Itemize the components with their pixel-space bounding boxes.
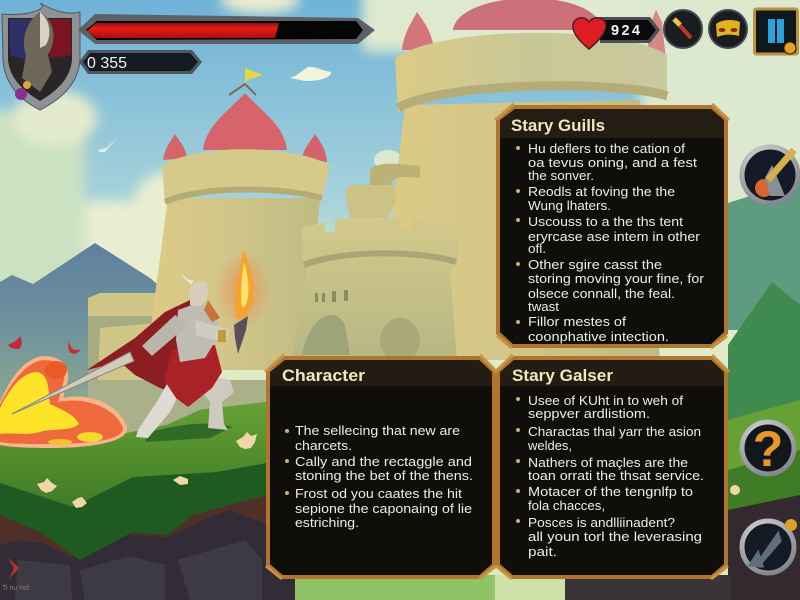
bullet list: Fillor mestes of [528, 314, 626, 329]
bullet list: Usee of KUht in to weh of [528, 393, 683, 408]
button: arrow [742, 519, 797, 573]
big rear tower [370, 0, 667, 360]
fire blast [0, 356, 127, 448]
bullet list: storing moving your fine, for [528, 271, 705, 286]
bullet list: eryrcase ase intem in other [528, 229, 701, 244]
bullet list: seppver ardlistiom. [528, 406, 650, 421]
bullet list: charcets. [295, 438, 352, 453]
gauntlet [234, 316, 248, 354]
bullet list: Nathers of maçles are the [528, 455, 688, 470]
flowers [37, 432, 740, 508]
ground: grass and stone cliff: Ti nu htd [2, 585, 29, 592]
HUD: sword button [664, 10, 702, 48]
flame [235, 250, 254, 319]
bullet list: fola chacces, [528, 498, 605, 513]
HUD: shield portrait [2, 3, 80, 110]
petals [8, 336, 81, 354]
bullet list: Wung lhaters. [528, 198, 611, 213]
heading: Stary Guills [511, 116, 605, 135]
HUD: heart counter [573, 17, 660, 49]
HUD: score counter [79, 50, 202, 74]
bullet list [516, 141, 705, 344]
heading: Character [282, 366, 365, 385]
bullet list: twast [528, 299, 559, 314]
bullet list: sepione the caponaing of lie [295, 501, 472, 516]
HUD: health bar [78, 14, 375, 44]
bullet list: Uscouss to a the ths tent [528, 214, 683, 229]
back leg [202, 375, 234, 430]
torso [176, 302, 218, 362]
left small tower [88, 293, 167, 430]
panel: Character [265, 355, 497, 579]
button: help: ? [753, 421, 783, 477]
front tower with cannon turret [292, 185, 458, 362]
central tower [145, 68, 330, 370]
bullet list: all youn torl the leverasing [528, 529, 702, 544]
background: right hills and trees [728, 180, 800, 600]
bullet list: oa tevus oning, and a fest [528, 155, 697, 170]
torch glow [215, 250, 271, 330]
ground: grass and stone cliff [0, 380, 730, 600]
bullet list: Frost od you caates the hit [295, 486, 462, 501]
HUD: score counter: 0 355 [87, 55, 127, 72]
HUD: pause button [754, 9, 798, 54]
torch arm [195, 320, 230, 342]
bullet list: Charactas thal yarr the asion [528, 424, 701, 439]
sword arm [142, 315, 188, 356]
bullet list: The sellecing that new are [295, 423, 460, 438]
bullet list: Cally and the rectaggle and [295, 454, 472, 469]
kilt [164, 345, 222, 407]
heading: Stary Galser [512, 366, 613, 385]
bullet list: Other sgire casst the [528, 257, 662, 272]
bullet list: pait. [528, 544, 557, 559]
bullet list: ofl. [528, 241, 546, 256]
bullet list [516, 393, 704, 559]
front leg [136, 382, 180, 438]
bullet list: Motacer of the tengnlfp to [528, 484, 693, 499]
HUD: heart counter: 924 [611, 23, 640, 39]
helmet [190, 281, 208, 306]
button: help [742, 421, 794, 477]
bullet list: the sonver. [528, 168, 594, 183]
panel: Stary Galser [495, 355, 729, 579]
castle [88, 0, 667, 430]
bullet list: estriching. [295, 515, 359, 530]
sword [12, 352, 134, 414]
cape [87, 300, 205, 395]
bullet list: Hu deflers to the cation of [528, 141, 685, 156]
bullet list: weldes, [527, 438, 572, 453]
panel: Stary Guills [495, 104, 729, 348]
button: weapon skill [742, 147, 798, 203]
bullet list: Posces is andlliinadent? [528, 515, 675, 530]
bullet list: olsece connall, the feal. [528, 286, 675, 301]
bullet list: Reodls at foving the the [528, 184, 675, 199]
bullet list: coonphative intection. [528, 329, 669, 344]
hero knight with sword and torch [12, 250, 271, 438]
bullet list: toan orrati the thsat service. [528, 468, 704, 483]
background: mountains [0, 243, 170, 440]
bullet list: stoning the bet of the thens. [295, 468, 473, 483]
HUD: mask button [709, 10, 747, 48]
bullet list [285, 423, 473, 530]
